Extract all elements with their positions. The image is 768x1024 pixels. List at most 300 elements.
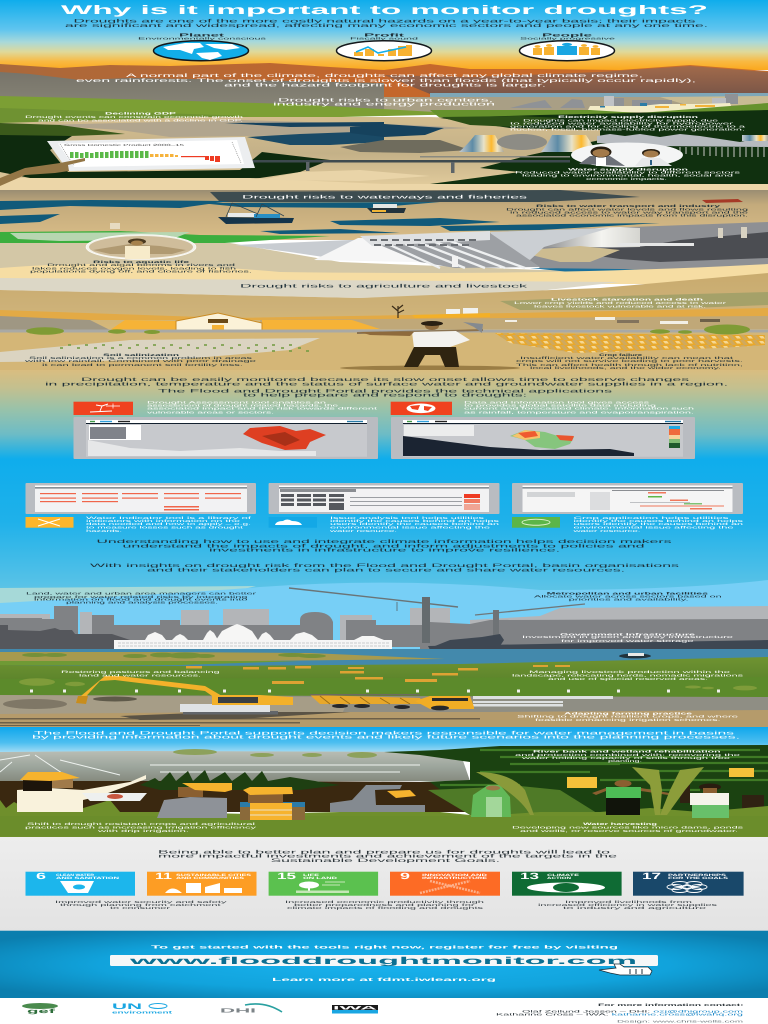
greenhouse field	[0, 751, 470, 782]
SDG tile 13: ACTION	[547, 876, 572, 880]
description	[86, 516, 251, 533]
panel: profit pillar	[336, 32, 432, 61]
text block: water transport: Risks to water transport and industry	[536, 204, 720, 208]
heading: urban risks: Drought risks to urban centers,	[278, 98, 493, 104]
icon: globe	[154, 41, 248, 61]
text block: electricity supply disruption: nuclear, fossil, biomass-fueled power generation.	[510, 127, 745, 131]
SDG tile 15	[269, 871, 378, 896]
worker with tablet	[17, 772, 147, 812]
SDG tile 9: INNOVATION AND	[422, 873, 489, 877]
dam body	[314, 231, 540, 268]
text block: metropolitan facilities: Metropolitan and urban facilities	[547, 592, 708, 596]
dome structure	[544, 227, 640, 247]
title: Why is it important to monitor droughts?	[61, 3, 708, 17]
text block: basin insights: and their stakeholders can plan to secure and share water resources.	[147, 567, 625, 573]
text block: portal supports	[32, 730, 740, 741]
intro text: Droughts are one of the more costly natural hazards on a year-to-year basis; their impacts	[74, 19, 697, 25]
benefit: livelihoods	[538, 900, 718, 910]
text block: livestock: Lower crop yields and reduced access to water	[514, 301, 729, 305]
text block: river bank rehabilitation: planting.	[608, 759, 642, 763]
text block: land water managers: Land, water and urban area managers can better	[26, 592, 259, 596]
text block: water transport: in reduced access to water way transport and the	[510, 211, 748, 215]
text block: metropolitan facilities: priorities and availability.	[569, 598, 689, 602]
man in green shirt	[592, 780, 675, 815]
text block: soil salinization: Soil salinization	[103, 353, 179, 357]
logo: GEF: gef	[27, 1008, 58, 1015]
pale sky patch	[0, 586, 256, 610]
benefit: water security: Improved water security and safety	[55, 900, 227, 904]
green pasture patch	[500, 292, 768, 310]
bridge	[250, 156, 570, 173]
logo: DHI	[220, 1004, 282, 1014]
dark shade strip	[210, 190, 640, 202]
river water	[225, 122, 384, 127]
description: environmental issue affecting the	[574, 526, 734, 530]
text block: electricity supply disruption: generation and for cooling of thermoelectric to a	[510, 124, 745, 128]
text block: water supply disruption: leading to environmental, health, social and	[522, 174, 733, 178]
text block: government infrastructure	[522, 632, 733, 643]
benefit: water security	[55, 900, 227, 910]
heading: planet: Planet	[179, 32, 226, 38]
icon: drought assessment	[74, 402, 133, 415]
screenshot: crop application	[512, 483, 743, 514]
text block: government infrastructure: for improved water storage	[561, 639, 694, 643]
crane right	[475, 604, 585, 636]
lower field	[0, 332, 768, 374]
palace	[114, 624, 392, 649]
seedlings	[60, 345, 320, 351]
description: users identify the causes behind an	[574, 522, 743, 526]
benefit: economic productivity	[285, 900, 484, 910]
palm trunks	[612, 785, 764, 813]
text block: aquatic life: Risks to aquatic life	[93, 260, 189, 264]
heading: people	[520, 32, 616, 41]
text block: monitoring intro: to help prepare and respond to droughts:	[243, 393, 527, 399]
description: water resource.	[330, 529, 397, 533]
text block: government infrastructure: Investment in green and grey infrastructure	[522, 635, 733, 639]
fence posts	[30, 690, 720, 692]
text block: land water managers: prepare for water related risks by integrating	[34, 595, 248, 599]
text block: land water managers: information on flood and drought events into	[34, 598, 248, 602]
panel: drought assessment tool	[74, 400, 378, 459]
dark buildings	[0, 625, 132, 650]
SDG tile 6: AND SANITATION	[56, 876, 121, 880]
text block: drought resistant crops: practices such as increasing irrigation efficiency	[25, 826, 257, 830]
design credit: Design: www.chris-wells.com	[617, 1020, 743, 1024]
screenshot: indicators	[26, 483, 256, 514]
text block: aquatic life: Drought and algal blooms in rivers and	[47, 263, 235, 267]
yellow fruit	[567, 768, 754, 788]
text block: metropolitan facilities: Allocate water across sectors based on	[534, 594, 722, 598]
gravel road	[0, 695, 768, 712]
text block: river bank rehabilitation: River bank and wetland rehabilitation	[533, 750, 721, 754]
register text: To get started with the tools right now, register for free by visiting	[151, 945, 619, 950]
text block: water supply disruption: economic impacts.	[586, 177, 667, 181]
panel background	[0, 931, 768, 998]
description	[574, 516, 744, 533]
panel: sustainable development goals	[0, 837, 768, 931]
screenshot: assessment map	[74, 417, 378, 459]
power plant	[597, 134, 768, 147]
logo: UN Environment	[112, 1002, 174, 1014]
circular fish vignette	[86, 234, 196, 260]
SDG tile 6: CLEAN WATER	[56, 873, 95, 877]
people portrait circle	[571, 142, 683, 168]
livestock in pasture	[186, 665, 570, 684]
panel: crop application tool	[512, 483, 744, 533]
benefit: livelihoods: Improved livelihoods from	[565, 900, 693, 904]
woman in white	[690, 784, 729, 818]
heading: profit: Fiscally sound	[350, 37, 419, 41]
description: to provides global satellite data including	[464, 403, 656, 407]
waterfront town	[587, 103, 733, 113]
blue band	[0, 727, 768, 753]
SDG tile 17: PARTNERSHIPS	[668, 873, 726, 877]
text block: soil salinization: with low rainfall. Combined with poor drainage	[25, 359, 256, 363]
text block: crop failure: Crop failure	[599, 353, 642, 357]
description: environmental issue affecting the	[330, 526, 490, 530]
description: associated impact and the risk towards different	[147, 406, 377, 410]
light buildings	[0, 606, 768, 645]
description: hazards.	[86, 529, 122, 533]
text block: land water managers	[26, 592, 259, 605]
distant skyline	[510, 94, 738, 108]
icon: hand cursor	[599, 964, 652, 975]
field bushes	[19, 678, 757, 690]
heading: profit	[350, 32, 419, 41]
text block: river bank rehabilitation: and protection combined with: recovering the	[515, 753, 740, 757]
text block: understanding climate information: investments in infrastructure to improve resilience.	[209, 548, 560, 554]
text block: declining GDP: Drought events can constrain economic growth	[25, 115, 243, 119]
mid green under-palm	[428, 786, 600, 815]
text block: water harvesting: Water harvesting	[583, 822, 657, 826]
URL box	[110, 955, 658, 967]
dump truck	[310, 694, 474, 710]
text block: water harvesting	[512, 822, 744, 833]
SDG tile 9: INFRASTRUCTURE	[422, 876, 487, 880]
grey foreground hills	[0, 72, 384, 112]
panel: issue analysis tool	[269, 483, 500, 533]
intro text	[158, 849, 618, 864]
description: as rainfall, temperature and evapotranspiration.	[464, 410, 694, 414]
dead tree	[392, 305, 404, 318]
hand holding tablet	[0, 158, 85, 186]
contact details	[496, 1003, 744, 1016]
screenshot: data map	[391, 417, 695, 459]
banana plant	[632, 767, 704, 815]
text block: river bank rehabilitation	[515, 750, 740, 763]
panel background	[0, 837, 768, 931]
footer background	[0, 998, 768, 1024]
grey river flats	[40, 120, 470, 137]
text block: restoring pastures: land and water resources.	[79, 674, 201, 678]
description: indicators with information on the	[86, 519, 240, 523]
intro text: Being able to better plan and prepare us for droughts will lead to	[158, 849, 611, 855]
road lines	[618, 243, 694, 246]
dark reservoir	[556, 232, 768, 262]
cream foreground bands	[0, 178, 768, 190]
text block: crop failure: crops will not survive leading to poor harvests.	[516, 359, 743, 363]
SDG tile 6: 6	[36, 871, 46, 881]
icon: people group	[520, 41, 614, 61]
text block: normal part of climate: and the hazard footprint for droughts is larger.	[224, 82, 546, 88]
shore house	[110, 223, 120, 229]
panel: water indicator tool	[26, 483, 256, 533]
text block: adapting farming	[517, 712, 738, 722]
salinated soil	[0, 338, 320, 362]
text block: electricity supply disruption: to reduced water availability for hydropower	[510, 121, 736, 125]
text block: normal part of climate	[76, 73, 696, 88]
palm canopy	[384, 745, 768, 815]
SDG tile 13: 13	[520, 871, 539, 881]
banana leaf left	[476, 772, 534, 815]
text block: drought resistant crops	[25, 822, 257, 833]
SDG tile 15: LIFE	[303, 873, 319, 877]
text block: monitoring intro: Drought can be easily monitored because its slow onset allows time to observe changes	[81, 377, 691, 383]
text block: water transport: associated economic impacts from this disruption.	[516, 214, 748, 218]
text block: monitoring intro: The Flood and Drought Portal provides the technical applications	[158, 388, 614, 394]
tree tops	[173, 749, 377, 758]
road	[0, 330, 768, 332]
text block: understanding climate information: understand the impacts of drought, and inform adjustments to policies and	[122, 543, 645, 549]
orange ridge	[0, 63, 768, 100]
description: vulnerable areas or sectors.	[147, 410, 274, 414]
failed crops	[495, 333, 765, 353]
intro text: are significant and widespread, affecting many economic sectors and people at any one time.	[65, 23, 708, 29]
illustration: mountains and urban landscape	[0, 63, 768, 190]
spillway water	[530, 268, 670, 274]
text block: portal supports: by providing information about drought events and likely future scenarios into the planning processes.	[32, 735, 740, 741]
red boat	[702, 199, 743, 203]
illustration: farmland and community	[0, 727, 768, 837]
small boat	[367, 204, 406, 213]
text block: adapting farming: Shifting to drought resilient crops, and where	[517, 714, 738, 718]
text block: electricity supply disruption: Droughts can impact electricity supply, due	[523, 118, 718, 122]
grass foreground	[0, 800, 768, 837]
fishing boat	[218, 203, 294, 224]
beige ground	[0, 243, 768, 282]
fence posts	[680, 147, 764, 157]
lower grass	[0, 816, 768, 836]
farmer	[340, 321, 520, 370]
SDG tile 11: AND COMMUNITIES	[176, 876, 244, 880]
text block: water harvesting: Developing new sources like micro dams, ponds	[512, 826, 744, 830]
text block: soil salinization	[25, 353, 256, 367]
description: identify the causes behind an helps	[330, 519, 500, 523]
bushes	[22, 652, 326, 658]
description: Drought Assessment tool enables an	[147, 400, 326, 404]
SDG tile 17	[633, 871, 744, 896]
icon: rising bars	[336, 41, 432, 61]
waterway ground	[0, 190, 768, 240]
distant tan hills	[384, 97, 768, 115]
logo: UN Environment: environment	[112, 1010, 174, 1014]
description	[147, 400, 377, 414]
text block: metropolitan facilities	[534, 592, 722, 602]
description: Data and Information tool gives access	[464, 400, 650, 404]
text block: aquatic life: lakes reduces oxygen levels, leading to fish	[32, 266, 236, 270]
text block: livestock: leaves livestock vulnerable and at risk.	[534, 304, 706, 308]
text block: drought resistant crops: Shift to drought resistant crops and agricultural	[27, 822, 256, 826]
text block: livestock: Livestock starvation and death	[551, 298, 703, 302]
SDG tile 6	[26, 871, 135, 896]
text block: managing livestock	[512, 670, 744, 681]
benefit: economic productivity: climate impacts of flooding and droughts	[287, 906, 484, 910]
illustration: agriculture and livestock	[0, 273, 768, 374]
text block: adapting farming: feasible enhancing irrigation schemes.	[535, 718, 721, 722]
text block: understanding climate information: Understanding how to use and integrate climate information helps decision makers	[96, 539, 673, 545]
mid buildings	[0, 606, 768, 650]
heading: profit: Profit	[364, 32, 406, 38]
dark grass spikes	[140, 770, 340, 790]
logo: IWA: IWA	[333, 1006, 379, 1012]
field ground	[0, 273, 768, 334]
dark vegetation right	[430, 110, 768, 186]
learn more text: Learn more at fdmt.iwlearn.org	[272, 977, 497, 982]
heading: urban risks: industry and energy production	[273, 102, 496, 108]
description: Crop application helps utilities	[574, 516, 730, 520]
text block: land water managers: planning and analysis processes.	[66, 601, 218, 605]
benefit: economic productivity: better preparedness and planning for	[294, 903, 477, 907]
sand foreground	[0, 264, 768, 284]
heading: waterways: Drought risks to waterways and fisheries	[242, 194, 529, 200]
panel: lower blue background	[0, 459, 768, 598]
livestock	[505, 317, 720, 324]
SDG tile 13	[512, 871, 622, 896]
icon: crop	[512, 517, 560, 528]
SDG tile 17: FOR THE GOALS	[668, 876, 728, 880]
logo: IWA	[332, 1005, 379, 1014]
text block: aquatic life: populations dying off, and closure of fisheries.	[30, 269, 252, 273]
logo: UN Environment: UN	[112, 1002, 143, 1011]
bushes	[26, 324, 750, 335]
heading: people: People	[542, 32, 594, 38]
contact details: Katharine Cross – IWA: katharine.cross@iwahq.org	[496, 1012, 743, 1016]
panel: planet pillar	[138, 32, 267, 61]
heading: agriculture: Drought risks to agriculture and livestock	[240, 284, 529, 290]
palm fronds	[440, 750, 768, 790]
panel: people pillar	[520, 32, 616, 61]
text block: water harvesting: and wells, or reserve sources of groundwater.	[520, 829, 738, 833]
text block: water transport	[506, 204, 748, 218]
description: assessment of drought related hazards, the	[147, 403, 338, 407]
SDG tile 11: SUSTAINABLE CITIES	[176, 873, 251, 877]
text block: basin insights: With insights on drought risk from the Flood and Drought Portal, basin organisations	[90, 563, 681, 569]
text block: portal supports: The Flood and Drought Portal supports decision makers responsible for water management in basins	[34, 730, 736, 736]
medium green right bank	[440, 116, 560, 127]
URL box: www.flooddroughtmonitor.com	[127, 956, 637, 967]
text block: restoring pastures	[61, 670, 220, 678]
cooling towers and dome	[459, 134, 597, 152]
panel: portal tools background	[0, 370, 768, 459]
SDG tile 15: 15	[277, 871, 296, 881]
orange band	[0, 308, 768, 320]
screenshot: issue analysis	[269, 483, 500, 514]
text block: drought resistant crops: with drip irrigation.	[98, 829, 189, 833]
mid field	[0, 677, 768, 697]
description: to measure losses such as drought	[86, 526, 243, 530]
logo: DHI: DHI	[220, 1008, 257, 1014]
panel: data and information tool	[391, 400, 695, 459]
text block: aquatic life	[30, 260, 252, 273]
text block: crop failure: Insufficient water availability can mean that	[520, 356, 733, 360]
green field	[0, 657, 768, 697]
heading: planet: Environmentally conscious	[138, 37, 267, 41]
description: identify the causes behind an helps	[574, 519, 744, 523]
silo truck	[412, 308, 490, 318]
icon: globe	[391, 402, 452, 415]
light blue sky	[0, 580, 768, 650]
text block: crop failure: This can affect health through lack of nutrition,	[516, 363, 743, 367]
text block: crop failure	[516, 353, 743, 370]
text block: basin insights	[90, 563, 681, 573]
dark vegetation left	[0, 135, 330, 183]
dark crane machine silhouette	[430, 634, 504, 648]
icon: cloud	[269, 517, 317, 528]
contact details: For more information contact:	[598, 1003, 744, 1007]
tan island	[0, 652, 445, 662]
text block: electricity supply disruption	[510, 115, 745, 131]
benefit: livelihoods: increased efficiency in water supplies	[538, 903, 718, 907]
SDG tile 15: ON LAND	[303, 876, 339, 880]
description: Issue analysis tool helps utilities	[330, 516, 485, 520]
illustration: waterways and fisheries	[0, 190, 768, 284]
brown ground	[0, 781, 470, 812]
dark lower band	[428, 640, 768, 650]
boat	[619, 653, 651, 658]
irrigation machine	[330, 785, 425, 812]
tablet with GDP chart	[47, 137, 255, 171]
pipes	[473, 696, 613, 706]
worker grey jacket	[157, 783, 232, 818]
SDG tile 13: CLIMATE	[547, 873, 579, 877]
text block: managing livestock: and use of special reserved areas.	[548, 677, 708, 681]
intro text: more impactful investments and achievement of the targets in the	[158, 854, 618, 860]
central dry riverbed	[0, 117, 768, 190]
text block: understanding climate information	[96, 539, 673, 554]
text block: normal part of climate: A normal part of the climate, droughts can affect any global climate regime,	[126, 73, 643, 79]
worker hi-vis vest	[240, 787, 305, 820]
benefit: economic productivity: Increased economic productivity through	[285, 900, 484, 904]
text block: restoring pastures: Restoring pastures and balancing	[61, 670, 220, 674]
algal bloom green shore	[0, 231, 330, 244]
text block: adapting farming: Adapting farming practice	[564, 712, 692, 716]
benefit: water security: through planning from catchment	[60, 903, 221, 907]
text block: soil salinization: Soil salinization is a common problem in areas	[29, 356, 253, 360]
red rock hill	[384, 66, 768, 94]
crane left	[289, 588, 458, 643]
panel: title and introduction	[61, 3, 708, 29]
SDG tile 9: 9	[400, 871, 410, 881]
text block: water supply disruption: Reduced water availability to different sectors	[515, 170, 741, 174]
text block: declining GDP: Declining GDP	[105, 111, 178, 115]
text block: normal part of climate: even rainforests. The onset of droughts is slower than floods (that typically occur rapidly),	[76, 78, 696, 84]
background: sky	[0, 0, 768, 70]
green hills	[0, 96, 470, 130]
heading: people: Socially progressive	[520, 37, 616, 41]
farm building	[110, 313, 380, 330]
panel: call to action	[0, 931, 768, 998]
text block: government infrastructure: Government Infrastructure	[560, 632, 695, 636]
panel: footer	[0, 998, 768, 1024]
water channels	[0, 200, 660, 234]
reservoir right	[490, 222, 768, 275]
description	[464, 400, 694, 414]
text block: livestock	[514, 298, 729, 308]
medium green bank	[0, 123, 125, 137]
heading: urban risks	[273, 98, 496, 108]
dam wings	[235, 240, 372, 258]
